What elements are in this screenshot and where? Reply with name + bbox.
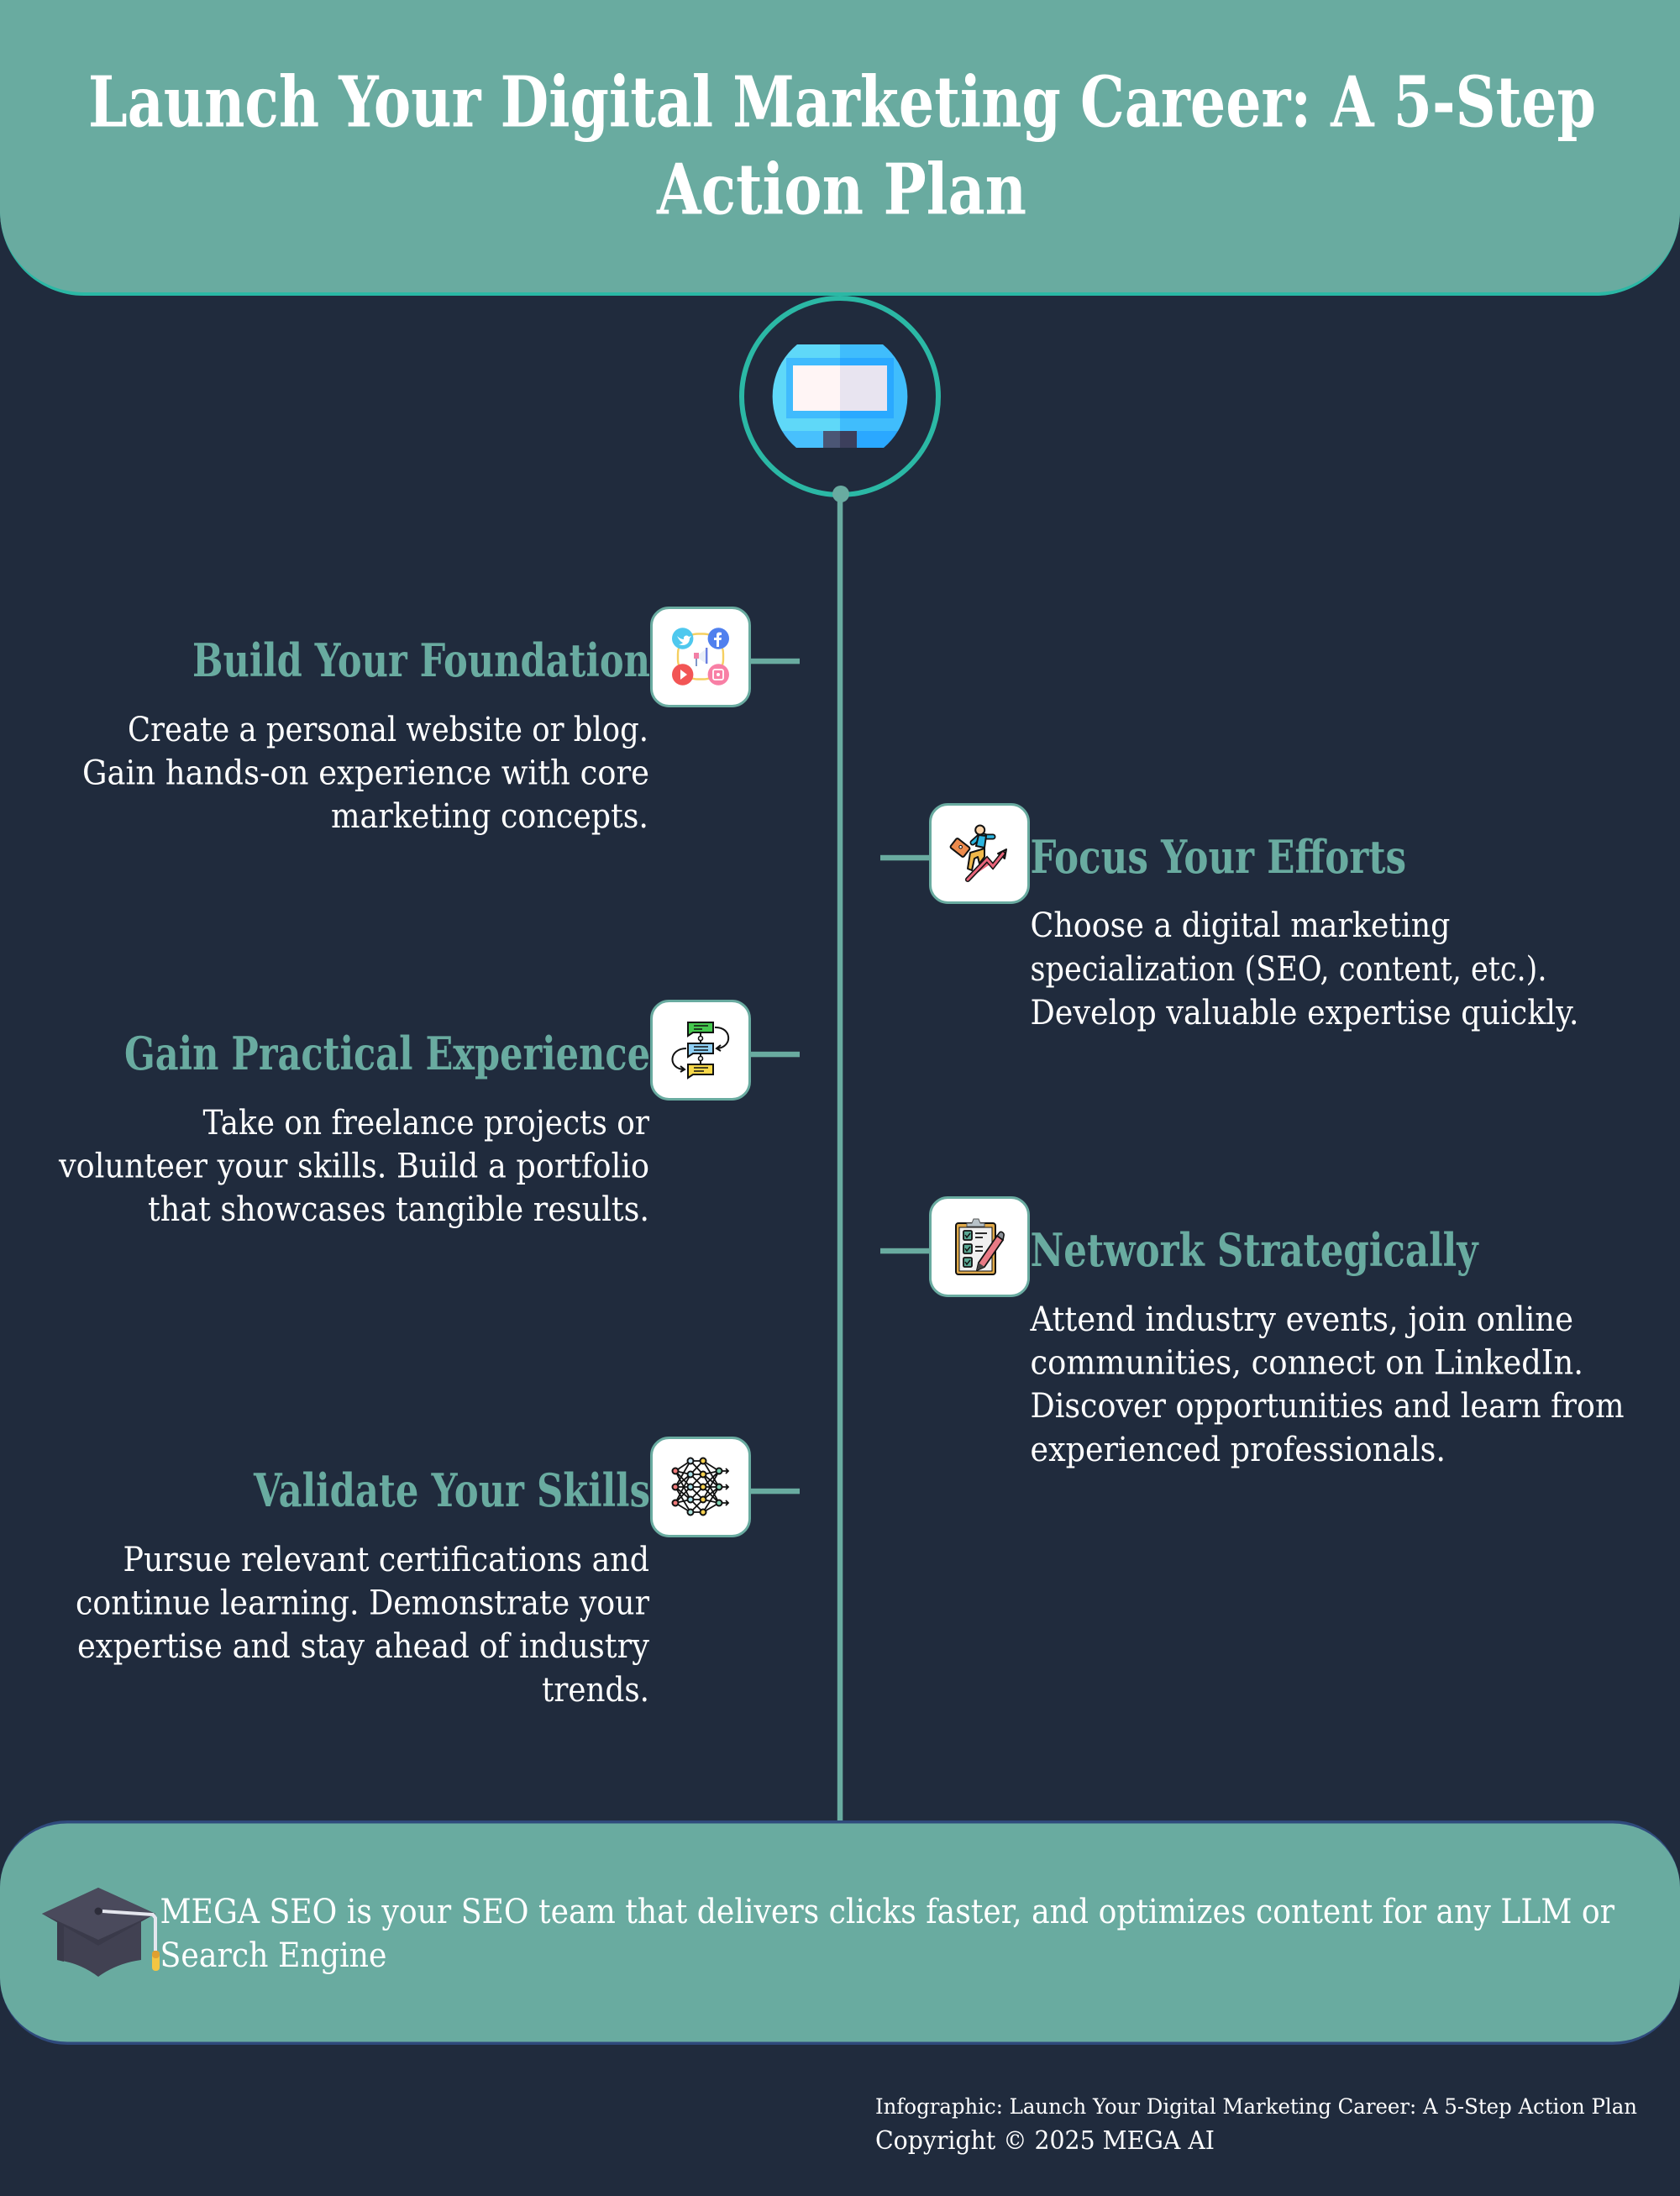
body 4: experienced professionals.	[1030, 1429, 1446, 1469]
body 5: continue learning. Demonstrate your	[76, 1583, 650, 1623]
connector 3	[749, 1052, 800, 1057]
body 5: Pursue relevant certifications and	[123, 1539, 649, 1579]
connector 4	[880, 1248, 932, 1253]
body 2: Develop valuable expertise quickly.	[1030, 992, 1579, 1032]
step 5: validate your skills	[76, 1438, 800, 1710]
body 4: Attend industry events, join online	[1030, 1299, 1573, 1339]
heading 1: Build Your Foundation	[192, 633, 650, 687]
body 3: volunteer your skills. Build a portfolio	[58, 1146, 649, 1186]
body 5: expertise and stay ahead of industry	[77, 1626, 649, 1666]
body 1: marketing concepts.	[331, 796, 648, 836]
step 1: build your foundation	[82, 608, 800, 836]
footer credits	[875, 2094, 1637, 2156]
body 1	[82, 709, 649, 836]
step 2: focus your efforts	[880, 805, 1579, 1032]
heading 5: Validate Your Skills	[253, 1463, 650, 1517]
body 4: Discover opportunities and learn from	[1030, 1385, 1625, 1426]
body 4	[1030, 1299, 1625, 1469]
body 3	[58, 1102, 650, 1229]
top circle with monitor icon	[742, 298, 938, 495]
connector 5	[749, 1489, 800, 1494]
body 5: trends.	[542, 1669, 649, 1710]
step 4: network strategically	[880, 1198, 1625, 1469]
footer credits: Infographic: Launch Your Digital Marketing Career: A 5-Step Action Plan	[875, 2094, 1637, 2119]
timeline dot	[832, 486, 849, 502]
body 1: Gain hands-on experience with core	[82, 753, 649, 793]
heading 2: Focus Your Efforts	[1030, 830, 1406, 884]
body 2	[1030, 905, 1579, 1032]
connector 1	[749, 659, 800, 664]
header banner	[0, 0, 1680, 296]
title	[88, 60, 1596, 230]
bottom callout panel	[0, 1820, 1680, 2045]
callout text: Search Engine	[160, 1935, 386, 1975]
icon box: clipboard checklist	[931, 1198, 1028, 1295]
timeline line	[837, 494, 843, 1823]
body 2: Choose a digital marketing	[1030, 905, 1450, 945]
body 3: that showcases tangible results.	[148, 1189, 649, 1229]
connector 2	[880, 855, 932, 860]
heading 4: Network Strategically	[1030, 1223, 1479, 1277]
body 3: Take on freelance projects or	[203, 1102, 650, 1143]
title: Action Plan	[656, 148, 1026, 230]
body 5	[76, 1539, 650, 1710]
footer credits: Copyright © 2025 MEGA AI	[875, 2126, 1215, 2156]
icon: graduation cap	[42, 1888, 160, 1977]
icon box: runner with rising arrow	[931, 805, 1028, 902]
callout text	[160, 1891, 1615, 1975]
icon box: social media	[652, 608, 749, 706]
body 4: communities, connect on LinkedIn.	[1030, 1342, 1583, 1383]
step 3: gain practical experience	[58, 1001, 800, 1229]
heading 3: Gain Practical Experience	[124, 1027, 650, 1080]
icon box: flow of chat bubbles	[652, 1001, 749, 1099]
icon box: neural network	[652, 1438, 749, 1536]
body 2: specialization (SEO, content, etc.).	[1030, 948, 1547, 989]
body 1: Create a personal website or blog.	[128, 709, 648, 749]
